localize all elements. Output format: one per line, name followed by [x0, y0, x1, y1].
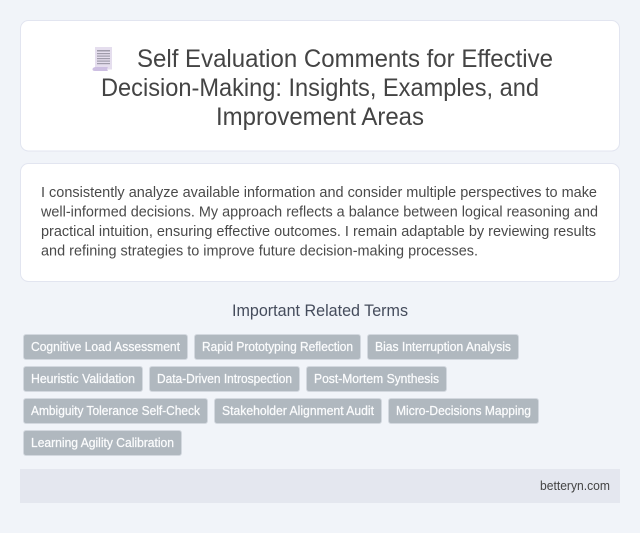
tag group: related terms	[24, 334, 538, 456]
tag: heuristic validation: Heuristic Validation	[31, 372, 135, 386]
tag: learning agility calibration: Learning Agility Calibration	[31, 436, 174, 450]
tag: cognitive load assessment: Cognitive Load Assessment	[31, 340, 180, 354]
heading: important related terms: Important Related Terms	[232, 302, 408, 320]
body paragraph: and refining strategies to improve future decision-making processes.	[41, 244, 478, 260]
tag: data-driven introspection: Data-Driven Introspection	[157, 372, 292, 386]
tag: stakeholder alignment audit: Stakeholder Alignment Audit	[222, 404, 375, 418]
panel: title card	[20, 20, 620, 151]
tag: data-driven introspection	[150, 366, 300, 392]
footer bar	[20, 469, 620, 503]
panel: self evaluation summary	[20, 164, 620, 282]
tag: learning agility calibration	[24, 430, 182, 456]
tag: ambiguity tolerance self-check: Ambiguity Tolerance Self-Check	[31, 404, 201, 418]
tag: post-mortem synthesis	[306, 366, 446, 392]
body paragraph	[40, 185, 598, 260]
tag: micro-decisions mapping: Micro-Decisions Mapping	[396, 404, 531, 418]
icon: document scroll	[92, 47, 112, 71]
tag: post-mortem synthesis: Post-Mortem Synthesis	[314, 372, 439, 386]
body paragraph: practical intuition, ensuring effective outcomes. I remain adaptable by reviewing results	[41, 224, 596, 240]
tag: heuristic validation	[24, 366, 142, 392]
title text	[101, 45, 553, 131]
body paragraph: well-informed decisions. My approach reflects a balance between logical reasoning and	[40, 204, 598, 220]
tag: cognitive load assessment	[24, 334, 188, 360]
title text: Improvement Areas	[216, 103, 424, 131]
tag: ambiguity tolerance self-check	[24, 398, 208, 424]
tag: bias interruption analysis	[368, 334, 518, 360]
tag: bias interruption analysis: Bias Interruption Analysis	[375, 340, 511, 354]
tag: micro-decisions mapping	[388, 398, 538, 424]
body paragraph: I consistently analyze available information and consider multiple perspectives to make	[41, 185, 597, 201]
footer source text: betteryn.com	[540, 479, 610, 493]
title text: Self Evaluation Comments for Effective	[137, 45, 553, 73]
tag: rapid prototyping reflection: Rapid Prototyping Reflection	[202, 340, 353, 354]
title text: Decision-Making: Insights, Examples, and	[101, 74, 539, 102]
tag: rapid prototyping reflection	[194, 334, 360, 360]
tag: stakeholder alignment audit	[214, 398, 382, 424]
